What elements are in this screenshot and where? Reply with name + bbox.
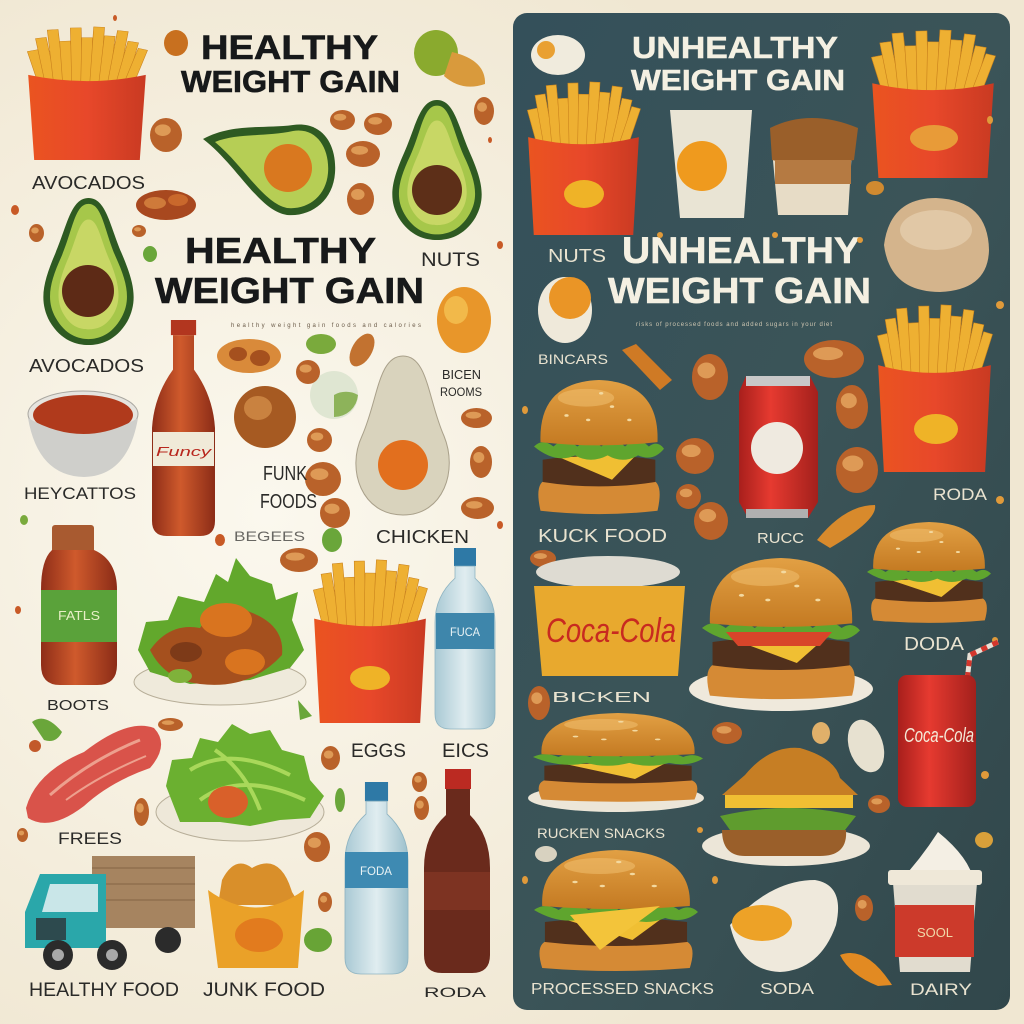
label: boots: BOOTS: [47, 697, 109, 714]
icon: fries second: [527, 82, 640, 235]
heading: healthy weight gain center: WEIGHT GAIN: [155, 270, 424, 311]
scattered foods center: [215, 329, 494, 572]
icon: egg bowl: [730, 880, 838, 972]
scattered nuts upper left: [11, 15, 503, 614]
icon: cola bottle: [424, 769, 490, 973]
heading: unhealthy weight gain main: UNHEALTHY: [622, 230, 860, 271]
icon: rice box coca-cola: Coca-Cola: [546, 612, 676, 650]
label: bicen rooms: BICEN: [442, 367, 481, 382]
label: doda: DODA: [904, 634, 964, 654]
icon: golden burger: [867, 522, 991, 623]
heading: healthy weight gain center: HEALTHY: [185, 230, 376, 271]
icon: bowl of spice: [28, 391, 138, 477]
label: roda: RODA: [933, 485, 988, 504]
label: heycattos: HEYCATTOS: [24, 484, 136, 503]
label: processed snacks: PROCESSED SNACKS: [531, 981, 714, 998]
label: healthy food: HEALTHY FOOD: [29, 980, 179, 1001]
label: funk foods: [260, 463, 317, 513]
label: junk food: JUNK FOOD: [203, 980, 325, 1001]
icon: junk food box: [208, 863, 304, 968]
label: bicen rooms: ROOMS: [440, 385, 482, 399]
small caption line: risks of processed foods and added sugars in your diet: [636, 322, 832, 328]
icon: dairy cup: SOOL: [917, 925, 953, 940]
label: bicen rooms: [440, 367, 482, 399]
label: nuts: NUTS: [548, 246, 606, 266]
icon: water bottle: [435, 548, 495, 729]
label: avocados: AVOCADOS: [32, 173, 145, 193]
label: bicken: BICKEN: [552, 689, 651, 706]
icon: truck: [25, 856, 195, 970]
panel: unhealthy weight gain: [522, 30, 1004, 999]
icon: walnut pile: [136, 190, 196, 220]
heading: unhealthy weight gain main: WEIGHT GAIN: [608, 270, 871, 311]
icon: egg top: [531, 35, 585, 75]
label: funk foods: FUNK: [263, 463, 308, 485]
icon: burger one: [534, 380, 664, 514]
icon: water bottle lower: FODA: [360, 864, 392, 878]
icon: coke can with straw: [898, 642, 998, 807]
label: chicken: CHICKEN: [376, 527, 469, 547]
icon: bread roll: [884, 198, 989, 292]
title: unhealthy weight gain top: UNHEALTHY: [632, 30, 838, 65]
icon: rice box coca-cola: [534, 556, 685, 676]
title: healthy weight gain: HEALTHY: [201, 29, 378, 67]
icon: avocado horizontal: [203, 125, 335, 215]
icon: steak: [26, 726, 161, 823]
label: soda: SODA: [760, 981, 814, 998]
icon: dessert cup: [770, 118, 858, 215]
title: healthy weight gain: [181, 29, 400, 99]
title: unhealthy weight gain top: WEIGHT GAIN: [631, 65, 845, 97]
label: begees: BEGEES: [234, 528, 305, 544]
label: bincars: BINCARS: [538, 351, 608, 367]
panel: healthy weight gain: [11, 15, 503, 1001]
icon: stacked sandwich on plate: [702, 748, 870, 866]
icon: egg avocado: [356, 356, 449, 515]
icon: egg left: [538, 277, 592, 343]
label: eics: EICS: [442, 741, 489, 762]
heading: healthy weight gain center: [155, 230, 424, 311]
label: kuck food: KUCK FOOD: [538, 526, 667, 546]
icon: burger with plate lower left: [528, 713, 704, 812]
icon: sauce jar: FATLS: [58, 608, 100, 623]
icon: soda can: [739, 376, 818, 518]
icon: sauce bottle: Funcy: [156, 444, 213, 459]
icon: water bottle lower: [345, 782, 408, 974]
title: healthy weight gain: WEIGHT GAIN: [181, 64, 400, 99]
icon: avocado vertical left: [43, 198, 134, 345]
icon: cup with egg: [670, 110, 752, 218]
icon: fries lower right: [877, 305, 992, 472]
label: dairy: DAIRY: [910, 980, 972, 999]
icon: sauce bottle: [152, 320, 215, 536]
label: rucc: RUCC: [757, 530, 804, 547]
heading: unhealthy weight gain main: [608, 230, 871, 311]
icon: small avocado top: [164, 30, 485, 87]
label: funk foods: FOODS: [260, 491, 317, 513]
title: unhealthy weight gain top: [631, 30, 845, 97]
icon: burger on plate: [689, 558, 873, 711]
icon: lower scatter: [17, 700, 429, 952]
icon: burger bottom: [534, 850, 698, 971]
icon: green salad: [156, 724, 324, 841]
icon: dairy cup: [888, 832, 982, 972]
icon: sauce jar: [41, 525, 117, 685]
icon: avocado vertical right: [392, 100, 482, 240]
label: frees: FREES: [58, 829, 122, 848]
icon: coke can with straw: Coca-Cola: [904, 725, 974, 747]
label: eggs: EGGS: [351, 741, 406, 762]
icon: orange fruit: [437, 287, 491, 353]
label: nuts: NUTS: [421, 250, 480, 271]
icon: fries top left: [27, 27, 148, 160]
icon: chicken salad: [134, 558, 306, 705]
label: roda: RODA: [424, 984, 487, 1000]
label: avocados second: AVOCADOS: [29, 356, 144, 376]
panel: unhealthy background: [513, 13, 1010, 1010]
small caption line: healthy weight gain foods and calories: [231, 323, 421, 329]
label: rucken snacks: RUCKEN SNACKS: [537, 825, 665, 841]
icon: water bottle: FUCA: [450, 625, 480, 639]
scattered nuts: [522, 116, 1004, 986]
icon: fries mid: [313, 560, 427, 723]
icon: fries top right: [871, 30, 996, 178]
